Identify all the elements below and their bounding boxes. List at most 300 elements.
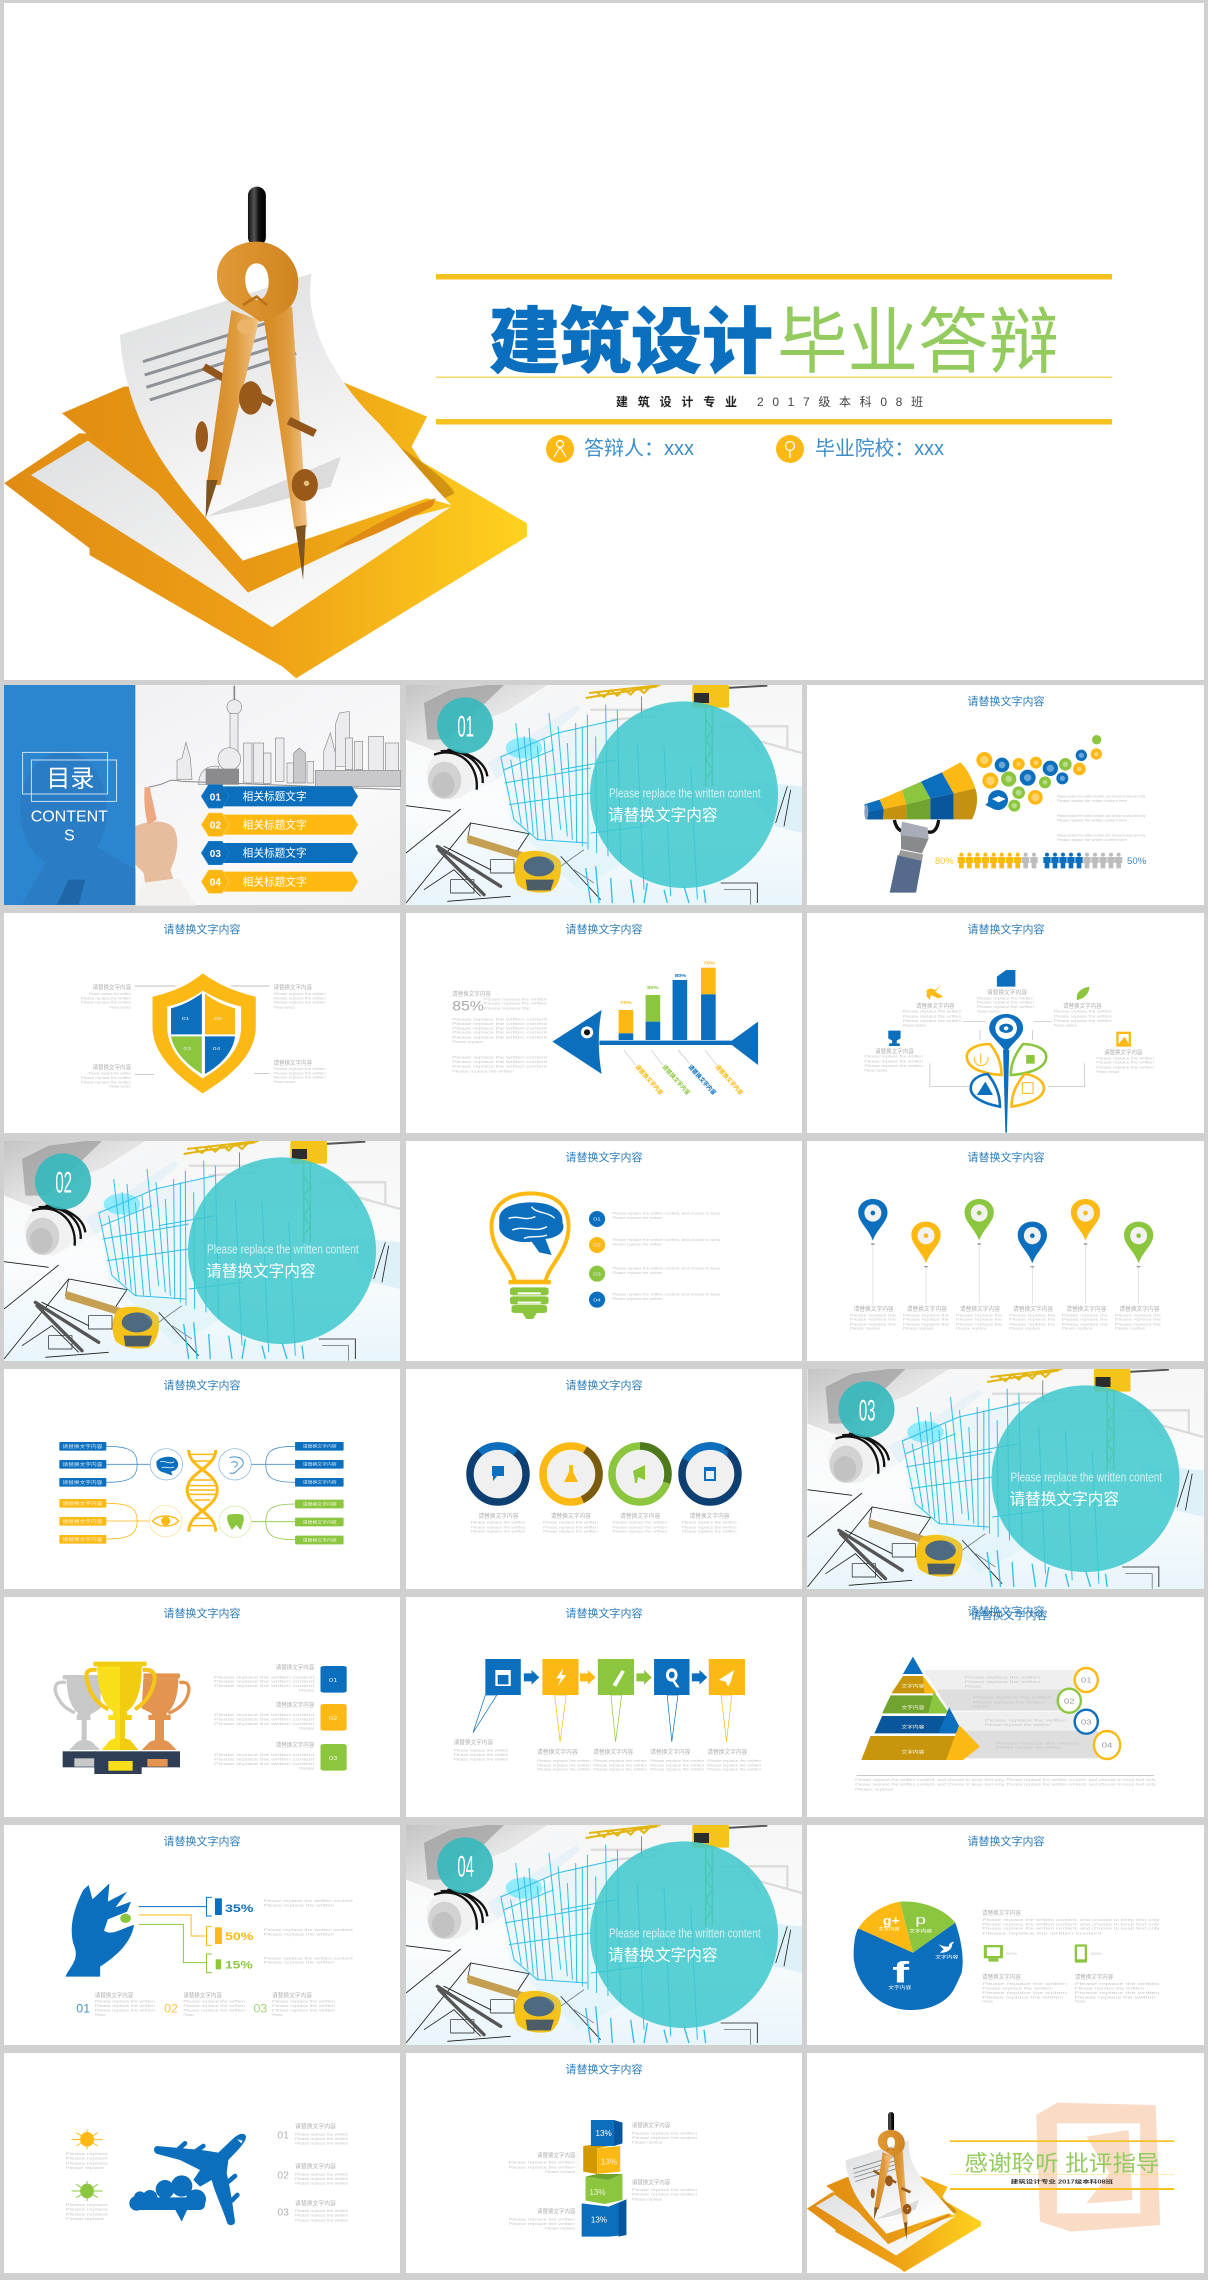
item 01: 01 <box>76 2002 90 2015</box>
right green labels: 请替换文字内容 <box>303 1537 337 1542</box>
text: intro <box>982 1909 1159 1935</box>
stat 35 percent <box>215 1898 254 1915</box>
text blocks: Please replace the written content <box>214 1714 315 1717</box>
icon: leaf <box>1077 987 1089 1000</box>
captions: Please replace the <box>956 1323 1003 1326</box>
text blocks: Please replace <box>1096 1071 1120 1074</box>
contents item 04: 04 <box>210 878 221 889</box>
list item 01: Please replace the written <box>295 2142 348 2146</box>
text blocks: Please replace the written content <box>452 1036 547 1039</box>
icon: silver trophy <box>55 1675 101 1767</box>
subtitle: 建筑设计专业 <box>616 394 737 409</box>
panel: megaphone slide <box>807 685 1204 905</box>
right green labels: 请替换文字内容 <box>303 1519 337 1524</box>
fish head <box>552 1010 602 1074</box>
item 02 <box>164 1992 245 2017</box>
text: lower left <box>508 2208 576 2230</box>
list item 01: Please replace the written <box>295 2138 348 2141</box>
left yellow labels: 请替换文字内容 <box>62 1519 102 1524</box>
captions: 请替换文字内容 <box>1013 1305 1053 1313</box>
text blocks: Please <box>299 1689 315 1693</box>
text: lower left: Please <box>982 2000 993 2004</box>
list item 01: 01 <box>277 2130 289 2141</box>
captions: Please replace <box>850 1327 881 1331</box>
text: upper right: 请替换文字内容 <box>632 2122 670 2129</box>
school <box>776 435 944 463</box>
stat 35 percent: 35% <box>225 1902 254 1915</box>
captions: Please replace the <box>1062 1314 1108 1317</box>
text: lower left <box>81 1064 131 1089</box>
text blocks: Please replace the written <box>612 1272 663 1275</box>
icon: tooth <box>227 1514 244 1530</box>
text blocks: Please replace the written <box>484 1002 547 1006</box>
captions: Please replace the <box>850 1318 897 1322</box>
text: lower right: Please replace <box>632 2198 663 2201</box>
panel: trophies slide <box>4 1597 400 1817</box>
icon: facebook f: f <box>892 1956 909 1989</box>
band text: Please replace the written <box>965 1681 1040 1684</box>
captions: Please replace the <box>850 1314 897 1317</box>
subtitle: 2017级本科08班 <box>757 395 923 409</box>
step captions: Please replace the written <box>537 1760 591 1763</box>
rib labels: 请替换文字内容 <box>661 1063 692 1097</box>
band text: Please replace the written <box>965 1676 1040 1680</box>
band text: Please replace the written <box>973 1701 1044 1704</box>
text blocks: Please replace the written content <box>452 1023 547 1026</box>
ring 2 <box>533 1436 609 1512</box>
ring 4 <box>672 1436 748 1512</box>
rib lines <box>624 1050 716 1065</box>
stat 50 percent: 50% <box>225 1930 254 1943</box>
text blocks: 请替换文字内容 <box>916 1002 955 1010</box>
band text: Please <box>965 1685 982 1689</box>
number dots: 02 <box>593 1243 601 1248</box>
top yellow bar <box>950 2140 1174 2142</box>
social pie diagram <box>854 1901 1159 2010</box>
text: intro: Please replace the written content <box>982 1932 1102 1935</box>
pins <box>858 1199 1153 1267</box>
step arrows <box>524 1670 707 1685</box>
section english line: Please replace the written content <box>609 785 761 800</box>
text blocks: Please replace the written <box>903 1010 961 1014</box>
text blocks: Please replace the written content <box>452 1018 547 1021</box>
text: left blocks <box>65 2153 109 2221</box>
list item 01: 请替换文字内容 <box>295 2123 336 2130</box>
process diagram <box>454 1659 761 1772</box>
ring captions: 请替换文字内容 <box>620 1512 660 1520</box>
text: left blocks: Please replace <box>65 2204 109 2207</box>
stat 50 percent <box>215 1927 254 1944</box>
heading: contents: S <box>64 827 75 844</box>
contents scene <box>4 685 400 906</box>
text block 3: Please replace the written content here <box>1057 838 1127 842</box>
text: upper right: Please replace the written <box>273 1001 326 1005</box>
step captions: Please replace the written <box>537 1764 591 1767</box>
item 03: Please <box>272 2014 283 2017</box>
panel: thank you slide <box>807 2053 1204 2273</box>
text blocks: Please replace the written content <box>214 1758 315 1761</box>
band text <box>965 1676 1079 1750</box>
captions: Please replace the <box>903 1323 950 1326</box>
contents item 02: 相关标题文字 <box>243 818 307 831</box>
text: lower right <box>273 1059 326 1084</box>
text: lower right: 请替换文字内容 <box>632 2179 670 2186</box>
captions: Please replace the <box>1062 1323 1108 1326</box>
left yellow labels: 请替换文字内容 <box>62 1537 102 1542</box>
panel: section 04 photo slide: 04 <box>457 1850 474 1883</box>
blue side panel <box>4 685 135 905</box>
number dots: 01 <box>593 1217 601 1222</box>
panel: plane slide <box>4 2053 400 2273</box>
shield diagram <box>81 973 326 1093</box>
ring captions: Please replace the written <box>682 1530 737 1534</box>
contents item 01: 相关标题文字 <box>243 790 307 803</box>
text block 2: Please replace the written content here <box>1057 819 1127 823</box>
text blocks: Please replace the written <box>612 1243 663 1246</box>
icon: striped megaphone <box>864 762 977 820</box>
ring captions: Please replace the written <box>543 1530 598 1534</box>
panel: section 01 photo slide <box>406 685 802 905</box>
list item 03: Please replace the written <box>295 2219 348 2222</box>
icon: eye <box>153 1516 179 1526</box>
bar values <box>620 960 715 1005</box>
icon: hand holding megaphone <box>890 820 939 893</box>
list item 02 <box>277 2163 348 2186</box>
text: lower right: Please replace the written <box>273 1068 326 1071</box>
icon: phone: 50% <box>1091 1953 1102 1956</box>
icon: truck <box>997 970 1015 987</box>
left blue labels: 请替换文字内容 <box>62 1444 102 1449</box>
text: left blocks: Please replace <box>65 2162 109 2165</box>
pie labels: 文字内容 <box>888 1985 912 1990</box>
text: upper right <box>632 2122 697 2145</box>
arrows <box>139 1897 212 1973</box>
contents item 01 <box>201 785 358 808</box>
pin stems <box>873 1243 1139 1303</box>
cubes diagram <box>508 2120 697 2237</box>
panel: stacked cubes slide <box>406 2053 802 2273</box>
cube: bottom blue <box>582 2199 626 2237</box>
step boxes <box>485 1659 745 1695</box>
panel: section 03 photo slide: 03 <box>859 1394 875 1427</box>
ring captions: Please replace the written <box>612 1521 667 1525</box>
icon: ear <box>230 1457 243 1473</box>
pin: top <box>989 1014 1023 1053</box>
bar values: 70% <box>703 960 715 965</box>
text: upper right <box>273 984 326 1009</box>
heading: contents <box>31 809 108 844</box>
contents item 03: 相关标题文字 <box>243 847 307 860</box>
heading: mulu: 目录 <box>46 765 94 792</box>
item 03: Please replace the written <box>272 2000 335 2004</box>
item 03: Please replace the written <box>272 2009 335 2013</box>
text: lower left: Please replace the written <box>982 1987 1052 1990</box>
icon: green sun <box>72 2181 102 2201</box>
text: upper right: Please replace the written <box>273 997 326 1000</box>
panel: social pie slide <box>807 1825 1204 2045</box>
text blocks: Please <box>299 1727 315 1731</box>
captions: Please replace the <box>1009 1323 1056 1326</box>
text blocks: Please replace the written content, and choose to keep <box>612 1267 721 1271</box>
text blocks: Please replace the written <box>977 1006 1034 1009</box>
captions: Please replace the <box>1009 1314 1056 1317</box>
contents item 04: 相关标题文字 <box>243 875 307 888</box>
stat text: Please replace the written <box>263 1961 334 1965</box>
trophy text and badges: 请替换文字内容 <box>276 1664 314 1671</box>
section title: 请替换文字内容 <box>608 1946 718 1964</box>
left yellow labels: 请替换文字内容 <box>62 1501 102 1506</box>
slide title: 请替换文字内容 <box>164 1606 240 1620</box>
text: lower right: 请替换文字内容 <box>1075 1973 1113 1981</box>
captions: Please replace the <box>903 1318 950 1322</box>
icon: picture <box>1116 1032 1131 1047</box>
text blocks: Please replace the written content, and choose to keep <box>612 1239 721 1242</box>
icon: twitter bird <box>938 1942 954 1953</box>
step captions: 请替换文字内容 <box>454 1739 493 1746</box>
shield diagram: Please replace the written <box>89 1072 131 1076</box>
right green labels <box>295 1500 344 1544</box>
thin divider <box>436 376 1112 378</box>
captions: Please replace the <box>1115 1318 1162 1322</box>
text blocks: Please replace the written content <box>214 1718 315 1721</box>
panel: ring charts slide <box>406 1369 802 1589</box>
right green labels: 请替换文字内容 <box>303 1501 337 1506</box>
icon: pinterest: p <box>915 1913 926 1927</box>
list item 01 <box>277 2123 348 2146</box>
text blocks: Please replace the written <box>977 1001 1034 1005</box>
item 03: Please replace the written <box>272 2005 335 2008</box>
tier labels: 文字内容 <box>901 1724 924 1729</box>
slide title: 请替换文字内容 <box>164 1834 240 1848</box>
divider and paragraph <box>855 1775 1156 1791</box>
item 01: Please replace the written <box>95 2009 155 2013</box>
step captions: Please replace the written <box>650 1760 704 1763</box>
bars <box>619 968 716 1040</box>
text blocks: Please replace the written <box>1054 1015 1112 1018</box>
text: lower left: Please replace the written <box>81 1081 131 1084</box>
right blue labels: 请替换文字内容 <box>303 1462 337 1467</box>
text: lower left: Please replace <box>545 2227 576 2230</box>
item 03: 03 <box>253 2002 267 2015</box>
cubes diagram: 请替换文字内容 <box>537 2208 576 2215</box>
cube: bottom blue: 13% <box>591 2216 607 2225</box>
bar values: 80% <box>647 985 659 990</box>
trophies illustration <box>55 1662 189 1774</box>
icon: blue hand <box>65 1883 134 1977</box>
thin divider <box>950 2173 1174 2176</box>
panel: hand percent slide <box>4 1825 400 2045</box>
section english line: Please replace the written content <box>207 1241 359 1256</box>
rib labels: 请替换文字内容 <box>687 1063 718 1097</box>
fish chart: 请替换文字内容 <box>452 990 491 998</box>
cube: yellow: 13% <box>601 2158 617 2167</box>
text: lower left: Please replace the written <box>508 2218 575 2221</box>
step captions: Please replace the written <box>537 1768 591 1772</box>
text block 2 <box>1057 814 1146 823</box>
pods <box>967 1044 1046 1107</box>
text blocks: Please replace the written <box>903 1020 961 1023</box>
text blocks: Please replace the written content <box>214 1723 315 1726</box>
panel: tree diagram slide <box>807 913 1204 1133</box>
text: intro: Please replace the written content, and choose to keep text only <box>982 1927 1159 1931</box>
text blocks: Please replace the written <box>977 997 1034 1000</box>
text: lower right: Please replace the written <box>1075 1992 1159 1995</box>
panel: section 03 photo slide <box>807 1369 1204 1589</box>
step captions: 请替换文字内容 <box>650 1748 690 1756</box>
captions: Please replace the <box>1115 1314 1162 1317</box>
bar values: 70% <box>620 1000 632 1005</box>
step captions: Please replace the written <box>454 1754 508 1757</box>
panel: process arrows slide <box>406 1597 802 1817</box>
captions: Please replace the <box>1115 1323 1162 1326</box>
contents item 02: 02 <box>210 821 221 832</box>
right blue labels: 请替换文字内容 <box>303 1444 337 1449</box>
text blocks: 请替换文字内容 <box>1063 1002 1102 1010</box>
step captions: Please replace the written <box>454 1749 508 1753</box>
slide title: 请替换文字内容 <box>164 1378 240 1392</box>
section title: 请替换文字内容 <box>608 806 718 824</box>
hand diagram <box>65 1883 353 2017</box>
text: left blocks: Please replace <box>65 2213 109 2216</box>
captions: 请替换文字内容 <box>854 1305 894 1313</box>
text blocks: Please replace the written content <box>214 1685 315 1688</box>
band text: Please replace the written <box>996 1742 1079 1745</box>
text block 3 <box>1057 833 1146 842</box>
title <box>489 303 1059 383</box>
title: 建筑设计 <box>489 303 773 383</box>
ring captions: Please replace the written <box>471 1526 525 1529</box>
text blocks: Please replace the written content <box>452 1061 547 1064</box>
text blocks: Please replace the written content <box>214 1676 315 1679</box>
ring 3 <box>612 1446 668 1502</box>
text blocks: Please replace the written <box>612 1298 663 1301</box>
text blocks: Please replace the written content <box>214 1763 315 1766</box>
text blocks: 请替换文字内容 <box>1104 1049 1143 1056</box>
stat text: Please replace the written <box>263 1904 334 1907</box>
icon: yellow sun <box>72 2129 102 2149</box>
icon: brain small <box>156 1457 178 1476</box>
icon: gold trophy <box>86 1662 155 1774</box>
captions: Please replace the <box>850 1323 897 1326</box>
faded portrait <box>20 751 135 905</box>
ring captions: Please replace the written <box>682 1526 737 1529</box>
text blocks: Please replace <box>1054 1024 1077 1028</box>
number rings: 02 <box>1064 1697 1075 1705</box>
tier labels: 文字内容 <box>901 1749 924 1755</box>
text blocks: Please replace the written content <box>452 1027 547 1030</box>
stat 15 percent: 15% <box>225 1959 253 1971</box>
step captions: 请替换文字内容 <box>593 1748 633 1756</box>
list item 01: Please replace the written <box>295 2133 348 2136</box>
step captions: Please replace the written <box>454 1758 508 1761</box>
text blocks: Please <box>299 1767 315 1771</box>
text blocks: Please replace the written content <box>452 1031 547 1035</box>
connector brackets <box>106 1446 295 1540</box>
icon: plane and cloud <box>129 2134 246 2225</box>
list item 03: 请替换文字内容 <box>295 2200 336 2207</box>
ring captions: 请替换文字内容 <box>551 1512 591 1520</box>
step captions: 请替换文字内容 <box>707 1748 747 1756</box>
trophy text and badges: 请替换文字内容 <box>276 1741 314 1749</box>
text: lower left: Please replace the written <box>982 1992 1067 1995</box>
text: lower left: Please replace the written <box>508 2223 575 2226</box>
captions: Please replace the <box>1062 1318 1108 1322</box>
pyramid tiers <box>861 1657 980 1760</box>
fish spine and tail <box>599 1022 758 1065</box>
captions: Please replace the <box>903 1314 950 1317</box>
text: upper right: Please replace the written <box>632 2132 697 2135</box>
text: upper left: Please replace the written <box>81 997 131 1000</box>
captions <box>850 1305 1162 1331</box>
heading: contents: CONTENT <box>31 809 108 826</box>
slide title: 请替换文字内容 <box>566 1378 642 1392</box>
item 02: Please <box>183 2014 195 2017</box>
ring captions: 请替换文字内容 <box>478 1512 519 1520</box>
DNA diagram <box>59 1442 344 1544</box>
tree diagram <box>864 970 1154 1133</box>
text: lower right: Please replace the written <box>273 1072 326 1075</box>
captions: 请替换文字内容 <box>1066 1305 1106 1313</box>
text blocks: Please replace the written content, and choose to keep <box>612 1293 721 1297</box>
cube: yellow <box>583 2144 620 2174</box>
text: intro: Please replace the written content, and choose to keep text only <box>982 1919 1159 1922</box>
icon: monitor: 60% <box>1006 1953 1018 1956</box>
social pie diagram: g+ <box>883 1914 900 1928</box>
badge 03: 03 <box>329 1756 337 1761</box>
left blue labels <box>59 1442 106 1487</box>
pie labels: 文字内容 <box>909 1928 932 1933</box>
text blocks: Please replace <box>903 1024 926 1028</box>
text: left blocks: Please replace <box>65 2218 105 2221</box>
icon: pointing hand <box>135 787 196 906</box>
panel: shield slide <box>4 913 400 1133</box>
ring 1 <box>459 1435 537 1513</box>
stat: 80 percent <box>935 853 1038 868</box>
captions: 请替换文字内容 <box>907 1305 947 1313</box>
text blocks: Please replace <box>977 1010 1000 1014</box>
illustration: compass on papers <box>807 2112 981 2272</box>
item 01: Please replace the written <box>95 2000 155 2004</box>
step captions: Please replace the written <box>707 1764 761 1767</box>
icon: shield: 03 <box>183 1046 191 1051</box>
band text: Please replace the written <box>996 1746 1062 1750</box>
step captions: Please replace the written <box>593 1760 647 1763</box>
shield diagram: Please replace <box>109 1006 131 1009</box>
icon: light bulb <box>492 1193 569 1319</box>
text blocks: 请替换文字内容 <box>987 989 1027 996</box>
panel: ring charts slide: 请替换文字内容 <box>690 1512 730 1520</box>
panel: map pins slide <box>807 1141 1204 1361</box>
text blocks: Please replace the written content <box>214 1754 315 1757</box>
list item 03: 03 <box>277 2206 289 2218</box>
text: lower right: Please replace the written <box>1075 1987 1144 1990</box>
band text: Please replace the written <box>985 1719 1067 1723</box>
step icons <box>495 1668 734 1687</box>
captions: 请替换文字内容 <box>960 1305 1000 1313</box>
item 03 <box>253 1992 335 2017</box>
shield diagram: Please replace <box>109 1085 131 1089</box>
thank you content <box>950 2140 1174 2190</box>
captions: Please replace the <box>1009 1318 1056 1322</box>
cube: top blue <box>591 2120 622 2146</box>
item 01: Please <box>95 2014 106 2017</box>
bar values: 80% <box>675 973 687 978</box>
slide title: 请替换文字内容 <box>566 1606 642 1620</box>
stat text: Please replace the written content <box>263 1900 353 1903</box>
tier labels: 文字内容 <box>901 1683 924 1688</box>
ring captions <box>471 1512 737 1534</box>
panel: section 01 photo slide: 01 <box>457 710 474 743</box>
